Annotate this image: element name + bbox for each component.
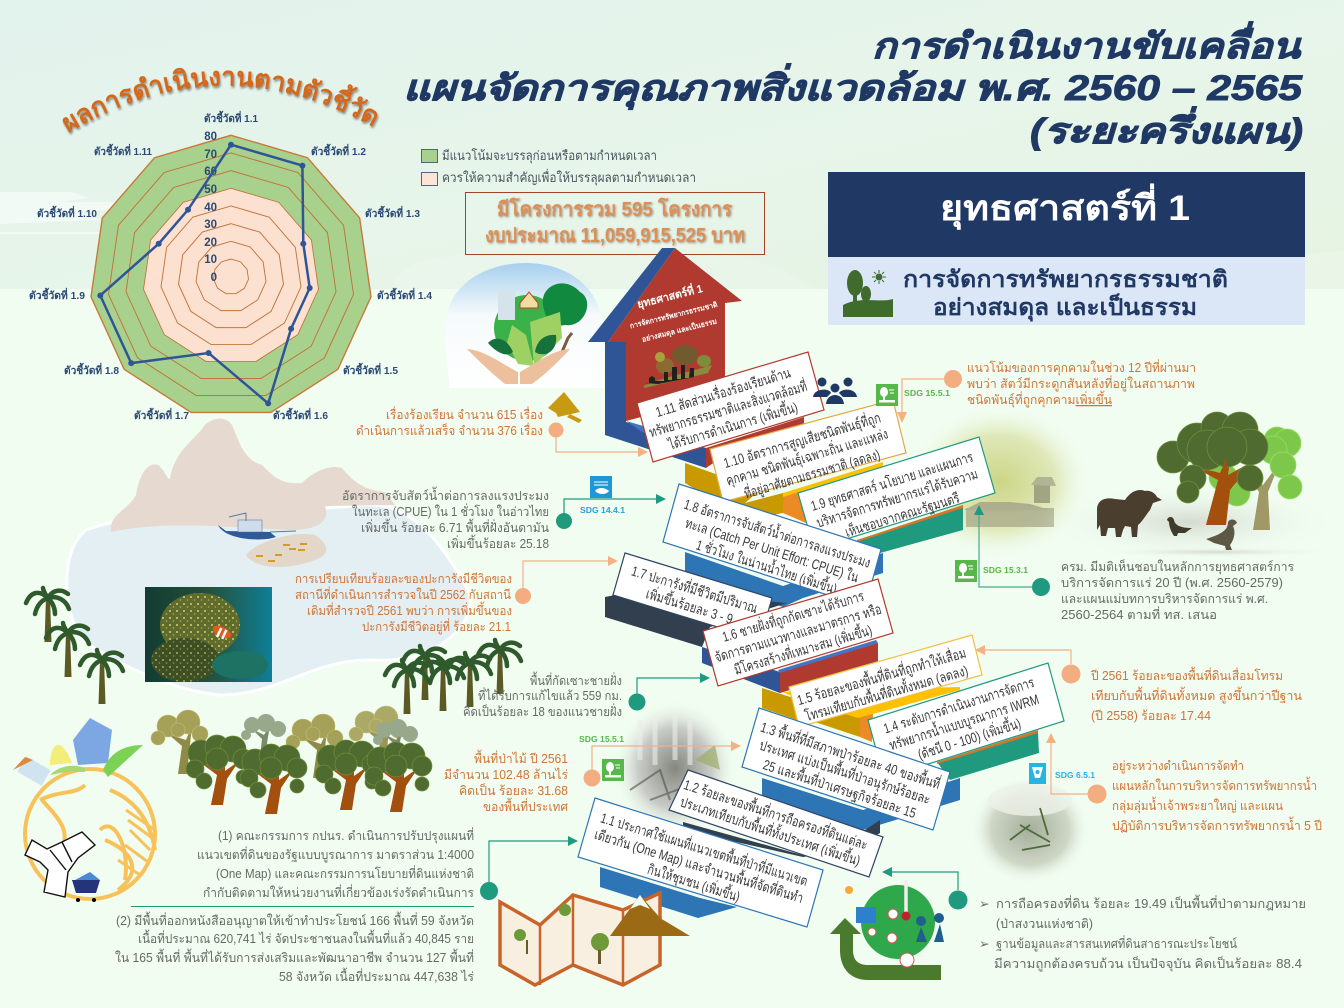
box: indicator 1.9: 1.9 ยุทธศาสตร์ นโยบาย และแผนการ: [809, 449, 976, 515]
box: indicator 1.3: 25 และพื้นที่ป่าเศรษฐกิจร้อยละ 15: [761, 754, 919, 822]
title: (ระยะครึ่งแผน): [1030, 106, 1303, 151]
ribbon: 1.8 blue: [685, 552, 883, 607]
photo: water plants: [970, 776, 1090, 884]
callout: threatened species trend: ชนิดพันธุ์ที่ถูกคุกคามเพิ่มขึ้น: [967, 390, 1112, 408]
callout: land holding bullets: ➢: [979, 897, 990, 911]
icon: hands holding plants: [445, 263, 604, 388]
radar chart: 10: [204, 254, 217, 266]
ribbon: 1.10 gold and orange: [685, 462, 883, 523]
callout: coastal erosion: พื้นที่กัดเซาะชายฝั่ง: [530, 671, 622, 688]
photo: rice terrace village: [908, 404, 1092, 560]
box: indicator 1.4: 1.4 ระดับการดำเนินงานการจัดการ: [881, 674, 1036, 737]
text block: One Map action: กำกับติดตามให้หน่วยงานที่เกี่ยวข้องเร่งรัดดำเนินการ: [203, 884, 474, 900]
callout: land holding bullets: ➢: [979, 937, 990, 951]
panel: staircase 3D ribbons and indicator boxes: [578, 248, 1064, 927]
callout: forest area: คิดเป็น ร้อยละ 31.68: [459, 783, 568, 798]
ribbon: 1.9 teal: [857, 505, 963, 553]
connector: CPUE to 1.8: [556, 494, 666, 529]
icon: SDG 15.5.1 forest: [579, 734, 624, 781]
box: indicator 1.7: เพิ่มขึ้นร้อยละ 3 - 9: [644, 583, 736, 627]
callout: degraded land: เทียบกับพื้นที่ดินทั้งหมด สูงขึ้นกว่าปีฐาน: [1091, 686, 1302, 704]
box: indicator 1.3: [742, 708, 950, 830]
legend: ควรให้ความสำคัญเพื่อให้บรรลุผลตามกำหนดเวลา: [442, 169, 696, 186]
callout: minerals strategy: บริการจัดการแร่ 20 ปี (พ.ศ. 2560-2579): [1061, 576, 1283, 590]
box: indicator 1.6: [703, 579, 893, 686]
box: indicator 1.4: (ดัชนี 0 - 100) (เพิ่มขึ้น): [915, 713, 1023, 762]
radar chart: ตัวชี้วัดที่ 1.11: [94, 143, 152, 158]
box: indicator 1.9: บริหารจัดการทรัพยากรแร่ได้รับความ: [814, 466, 980, 530]
ribbon: 1.6 blue and red: [702, 640, 878, 693]
icon: landscape with sun: [843, 270, 893, 317]
callout: water management: ปฏิบัติการบริหารจัดการทรัพยากรน้ำ 5 ปี: [1112, 816, 1322, 833]
connector: land holding to 1.2: [882, 867, 968, 910]
callout: land holding bullets: ฐานข้อมูลและสารสนเทศที่ดินสาธารณะประโยชน์: [996, 935, 1237, 952]
radar chart: 80: [204, 131, 217, 143]
callout: land holding bullets: [979, 894, 1306, 972]
callout: water management: [1112, 759, 1322, 833]
callout: degraded land: [1091, 666, 1302, 723]
text block: land allocation: (2) มีพื้นที่ออกหนังสืออนุญาตให้เข้าทำประโยชน์ 166 พื้นที่ 59 จังหวัด: [116, 911, 474, 929]
ribbon: 1.5 gold and orange: [762, 687, 960, 742]
callout: forest area: มีจำนวน 102.48 ล้านไร่: [444, 768, 568, 782]
radar chart: ตัวชี้วัดที่ 1.7: [134, 407, 189, 422]
icon: folded map: [500, 893, 690, 985]
icon: SDG 6.5.1: SDG 6.5.1: [1055, 770, 1095, 780]
callout: minerals strategy: [1061, 559, 1294, 622]
text block: land allocation: เนื้อที่ประมาณ 620,741 ไร่ จัดประชาชนลงในพื้นที่แล้ว 40,845 ราย: [138, 929, 474, 946]
icon: SDG 14.4.1: [580, 476, 625, 515]
box: indicator 1.5: [789, 635, 982, 727]
panel: strategy 1 heading: ยุทธศาสตร์ที่ 1: [940, 183, 1190, 230]
panel: strategy 1 heading: [828, 172, 1305, 257]
photo: clownfish and coral: [145, 587, 272, 682]
box: indicator 1.9: [798, 437, 995, 549]
callout: catch per unit effort: ในทะเล (CPUE) ใน 1 ชั่วโมง ในอ่าวไทย: [352, 503, 549, 519]
box: indicator 1.6: จัดการตามแนวทางและมาตรการ หรือ: [713, 601, 883, 665]
radar chart: ตัวชี้วัดที่ 1.10: [37, 205, 97, 220]
ribbon: 1.1 blue: [600, 867, 737, 918]
radar chart: ตัวชี้วัดที่ 1.2: [311, 143, 366, 158]
icon: megaphone: [548, 392, 582, 423]
photo: forest mangrove: [613, 700, 737, 836]
radar chart: 60: [204, 166, 217, 178]
radar chart: ตัวชี้วัดที่ 1.1: [204, 110, 258, 125]
box: indicator 1.10: ที่อยู่อาศัยตามธรรมชาติ (ลดลง): [742, 445, 882, 502]
box: indicator 1.5: โทรมเทียบกับพื้นที่ดินทั้งหมด (ลดลง): [802, 660, 970, 724]
connector: complaints to 1.11: [548, 422, 648, 457]
icon: SDG 15.5.1 forest: SDG 15.5.1: [579, 734, 624, 744]
legend: [422, 148, 696, 186]
callout: projects and budget: งบประมาณ 11,059,915,525 บาท: [485, 225, 745, 247]
callout: complaints: ดำเนินการแล้วเสร็จ จำนวน 376 เรื่อง: [356, 422, 543, 438]
text block: One Map action: (One Map) และคณะกรรมการนโยบายที่ดินแห่งชาติ: [216, 865, 474, 881]
radar chart: 70: [204, 149, 217, 161]
box: indicator 1.4: [868, 663, 1064, 778]
radar chart: ตัวชี้วัดที่ 1.5: [343, 362, 398, 377]
radar chart: 40: [204, 202, 217, 214]
callout: land holding bullets: (ป่าสงวนแห่งชาติ): [996, 917, 1093, 931]
ribbon: 1.2 navy: [683, 820, 880, 860]
ribbon: 1.3 blue: [762, 778, 960, 830]
radar chart: ตัวชี้วัดที่ 1.3: [365, 205, 420, 220]
radar chart: 30: [204, 219, 217, 231]
callout: catch per unit effort: [342, 486, 549, 551]
connector: One Map to 1.1: [480, 836, 578, 900]
box: indicator 1.11: ทรัพยากรธรรมชาติและสิ่งแวดล้อมที่: [647, 377, 809, 440]
box: indicator 1.3: ประเทศ แบ่งเป็นพื้นที่ป่าอนุรักษ์ร้อยละ: [757, 735, 933, 808]
box: indicator 1.11: 1.11 สัดส่วนเรื่องร้องเรียนด้าน: [653, 363, 793, 420]
icon: SDG 14.4.1: SDG 14.4.1: [580, 505, 625, 515]
callout: forest area: พื้นที่ป่าไม้ ปี 2561: [474, 749, 568, 766]
text block: land allocation: [115, 911, 474, 984]
connector: degraded land to 1.5: [975, 645, 1080, 684]
box: indicator 1.6: 1.6 ชายฝั่งที่ถูกกัดเซาะได้รับการ: [720, 587, 866, 646]
callout: threatened species trend: [967, 359, 1196, 408]
connector: coral to 1.7: [515, 556, 618, 604]
box: indicator 1.8: ทะเล (Catch Per Unit Effort: CPUE) ใน: [683, 515, 861, 585]
box: indicator 1.5: 1.5 ร้อยละของพื้นที่ดินที่ถูกทำให้เสื่อม: [795, 643, 968, 709]
box: indicator 1.11: [637, 352, 824, 462]
callout: land holding bullets: มีความถูกต้องครบถ้วน เป็นปัจจุบัน คิดเป็นร้อยละ 88.4: [994, 956, 1302, 972]
panel: strategy 1 subtitle: อย่างสมดุล และเป็นธรรม: [933, 292, 1197, 322]
callout: minerals strategy: 2560-2564 ตามที่ ทส. เสนอ: [1061, 606, 1217, 622]
connector: erosion to 1.6: [628, 673, 710, 710]
text block: land allocation: 58 จังหวัด เนื้อที่ประมาณ 447,638 ไร่: [279, 967, 474, 984]
box: indicator 1.2: 1.2 ร้อยละของพื้นที่การถือครองที่ดินแต่ละ: [682, 774, 871, 853]
callout: catch per unit effort: เพิ่มขึ้นร้อยละ 25.18: [447, 534, 549, 551]
icon: strategy house arrow: การจัดการทรัพยากรธรรมชาติ: [629, 300, 718, 330]
radar chart: ตัวชี้วัดที่ 1.9: [29, 287, 85, 302]
callout: coastal erosion: [463, 671, 622, 719]
radar chart: 0: [211, 272, 217, 284]
callout: degraded land: ปี 2561 ร้อยละของพื้นที่ดินเสื่อมโทรม: [1091, 666, 1283, 683]
callout: coral comparison: [295, 572, 512, 635]
icon: SDG 15.3.1: [955, 560, 1028, 582]
callout: water management: กลุ่มลุ่มน้ำเจ้าพระยาใหญ่ และแผน: [1112, 796, 1283, 814]
box: indicator 1.8: [663, 484, 881, 607]
callout: projects and budget: [466, 192, 764, 254]
box: indicator 1.8: 1.8 อัตราการจับสัตว์น้ำต่อการลงแรงประมง: [682, 494, 873, 571]
ribbon: 1.4 teal: [937, 730, 1039, 780]
map of sea, mountain and boat: [67, 419, 470, 695]
box: indicator 1.8: 1 ชั่วโมง ในน่านน้ำไทย (เพิ่มขึ้น): [694, 535, 840, 597]
radar chart: ตัวชี้วัดที่ 1.8: [64, 362, 119, 377]
net of fish: [246, 534, 326, 567]
callout: forest area: ของพื้นที่ประเทศ: [483, 797, 568, 814]
icon: SDG 15.5.1 species: [876, 384, 950, 406]
icon: fishing boat: [218, 513, 296, 539]
connector: water to 1.4: [1046, 733, 1106, 804]
box: indicator 1.1: 1.1 ประกาศใช้แผนที่แนวเขตพื้นที่ป่าที่มีแนวเขต: [599, 808, 810, 889]
box: indicator 1.10: [710, 400, 906, 506]
icon: SDG 6.5.1: [1029, 763, 1095, 784]
icon: forest tree row: [151, 706, 432, 814]
radar chart: ตัวชี้วัดที่ 1.4: [377, 287, 432, 302]
radar chart: 50: [204, 184, 217, 196]
callout: catch per unit effort: เพิ่มขึ้น ร้อยละ 6.71 พื้นที่ฝั่งอันดามัน: [361, 518, 549, 535]
icon: cow, ducks and trees: [1040, 412, 1340, 560]
icon: SDG 15.3.1: SDG 15.3.1: [983, 565, 1028, 575]
box: indicator 1.9: เห็นชอบจากคณะรัฐมนตรี: [843, 488, 962, 541]
text block: One Map action: (1) คณะกรรมการ กปนร. ดำเนินการปรับปรุงแผนที่: [218, 827, 474, 844]
icon: globe with joined hands: [13, 718, 155, 902]
title: [403, 21, 1303, 151]
box: indicator 1.1: กินให้ชุมชน (เพิ่มขึ้น): [645, 859, 743, 906]
callout: water management: อยู่ระหว่างดำเนินการจัดทำ: [1112, 759, 1244, 774]
box: indicator 1.6: มีโครงสร้างที่เหมาะสม (เพิ่มขึ้น): [732, 620, 874, 678]
callout: threatened species trend: พบว่า สัตว์มีกระดูกสันหลังที่อยู่ในสถานภาพ: [967, 375, 1195, 392]
callout: coral comparison: ปะการังมีชีวิตอยู่ที่ ร้อยละ 21.1: [362, 618, 511, 635]
callout: land holding bullets: การถือครองที่ดิน ร้อยละ 19.49 เป็นพื้นที่ป่าตามกฎหมาย: [996, 894, 1306, 911]
icon: green land management arrow with pins: [830, 880, 944, 980]
connector: forest area to 1.3: [584, 741, 741, 786]
heading: curved radar title: ผลการดำเนินงานตามตัวชี้วัด: [62, 68, 380, 136]
panel: strategy 1 subtitle: การจัดการทรัพยากรธรรมชาติ: [903, 266, 1228, 292]
callout: catch per unit effort: อัตราการจับสัตว์น้ำต่อการลงแรงประมง: [342, 486, 549, 503]
ribbon: 1.7 navy: [605, 590, 787, 647]
box: indicator 1.11: ได้รับการดำเนินการ (เพิ่มขึ้น): [665, 397, 800, 453]
panel: strategy 1 subtitle: [828, 257, 1305, 325]
radar chart: 20: [204, 237, 217, 249]
box: indicator 1.7: [613, 553, 772, 640]
callout: forest area: [444, 749, 568, 814]
icon: people group: [813, 378, 857, 404]
callout: coastal erosion: ที่ได้รับการแก้ไขแล้ว 559 กม.: [478, 687, 622, 703]
title: การดำเนินงานขับเคลื่อน: [872, 21, 1302, 66]
callout: coral comparison: สถานีที่ดำเนินการสำรวจในปี 2562 กับสถานี: [295, 586, 511, 602]
box: indicator 1.1: เดียวกัน (One Map) และจำนวนพื้นที่จัดที่ดินทำ: [593, 824, 806, 906]
callout: minerals strategy: ครม. มีมติเห็นชอบในหลักการยุทธศาสตร์การ: [1061, 559, 1294, 575]
icon: SDG 15.5.1 species: SDG 15.5.1: [904, 388, 950, 398]
connector: species trend to 1.10: [897, 370, 962, 423]
ribbon: 1.11 red band: [706, 417, 804, 468]
callout: coastal erosion: คิดเป็นร้อยละ 18 ของแนวชายฝั่ง: [463, 703, 622, 719]
box: indicator 1.10: 1.10 อัตราการสูญเสียชนิดพันธุ์ที่ถูก: [721, 408, 883, 472]
text block: land allocation: ใน 165 พื้นที่ พื้นที่ได้รับการส่งเสริมและพัฒนาอาชีพ จำนวน 127 พื้นที่: [115, 948, 474, 965]
callout: complaints: เรื่องร้องเรียน จำนวน 615 เรื่อง: [386, 406, 543, 422]
icon: right palm trees: [385, 640, 521, 714]
text block: One Map action: แนวเขตที่ดินของรัฐแบบบูรณาการ มาตราส่วน 1:4000: [197, 846, 474, 863]
icon: left palm trees: [26, 588, 123, 704]
callout: degraded land: (ปี 2558) ร้อยละ 17.44: [1091, 709, 1211, 723]
box: indicator 1.1: [578, 798, 823, 927]
callout: complaints: [356, 406, 543, 438]
box: indicator 1.3: 1.3 พื้นที่ที่มีสภาพป่าร้อยละ 40 ของพื้นที่: [759, 717, 943, 792]
connector: minerals to 1.9: [974, 505, 1050, 596]
title: แผนจัดการคุณภาพสิ่งแวดล้อม พ.ศ. 2560 – 2565: [403, 63, 1303, 110]
icon: strategy house arrow: อย่างสมดุล และเป็นธรรม: [641, 316, 718, 344]
callout: coral comparison: เดิมที่สำรวจปี 2561 พบว่า การเพิ่มขึ้นของ: [307, 601, 512, 618]
box: indicator 1.10: คุกคาม ชนิดพันธุ์เฉพาะถิ่น และแหล่ง: [724, 425, 890, 489]
legend: มีแนวโน้มจะบรรลุก่อนหรือตามกำหนดเวลา: [442, 148, 657, 164]
box: indicator 1.2: ประเภทเทียบกับพื้นที่ทั้งประเทศ (เพิ่มขึ้น): [678, 792, 863, 869]
callout: coral comparison: การเปรียบเทียบร้อยละของปะการังมีชีวิตของ: [295, 572, 512, 586]
icon: strategy house arrow: [588, 248, 742, 468]
callout: projects and budget: มีโครงการรวม 595 โครงการ: [497, 197, 732, 221]
radar chart: ตัวชี้วัดที่ 1.6: [273, 407, 328, 422]
radar chart: [29, 110, 432, 422]
icon: strategy house arrow: ยุทธศาสตร์ที่ 1: [635, 280, 704, 312]
callout: threatened species trend: แนวโน้มของการคุกคามในช่วง 12 ปีที่ผ่านมา: [967, 359, 1196, 376]
box: indicator 1.4: ทรัพยากรน้ำแบบบูรณาการ IWRM: [887, 689, 1041, 754]
text block: One Map action: [197, 827, 474, 900]
box: indicator 1.7: 1.7 ปะการังที่มีชีวิตมีปริมาณ: [630, 562, 760, 616]
callout: water management: แผนหลักในการบริหารจัดการทรัพยากรน้ำ: [1112, 776, 1317, 793]
callout: minerals strategy: และแผนแม่บทการบริหารจัดการแร่ พ.ศ.: [1061, 592, 1268, 606]
